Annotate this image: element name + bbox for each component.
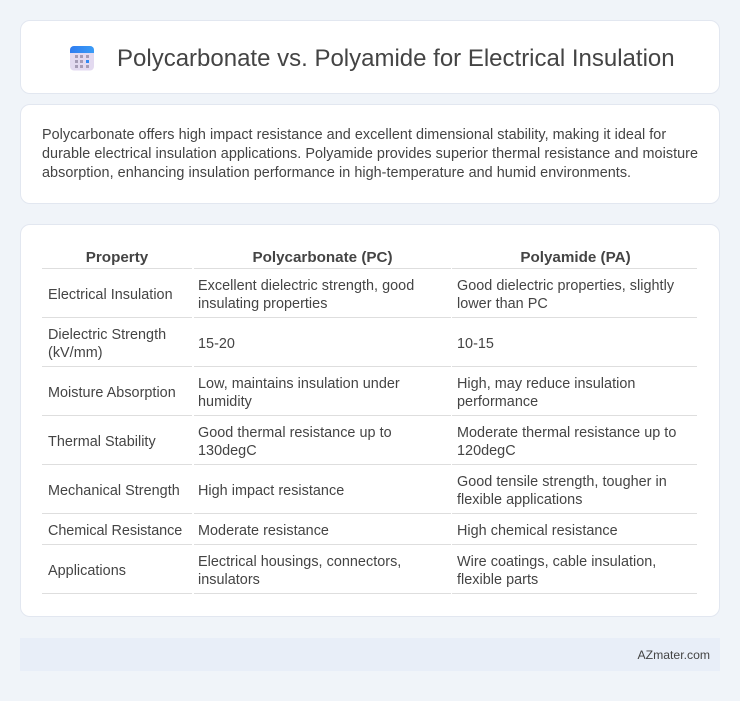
row: dielectric strength: (kV/mm) xyxy=(48,345,103,361)
row: electrical insulation xyxy=(48,278,674,312)
panel: title card xyxy=(20,20,720,94)
row: chemical resistance: Chemical Resistance xyxy=(48,523,182,539)
row: chemical resistance xyxy=(48,523,618,539)
row: mechanical strength: Mechanical Strength xyxy=(48,483,180,499)
summary text: Polycarbonate offers high impact resistance and excellent dimensional stability, making it ideal for xyxy=(42,127,666,143)
title: Polycarbonate vs. Polyamide for Electrical Insulation xyxy=(117,45,675,72)
table header xyxy=(86,249,631,266)
row: chemical resistance: High chemical resistance xyxy=(457,523,618,539)
summary text xyxy=(42,127,698,181)
row: electrical insulation: Good dielectric properties, slightly xyxy=(457,278,674,294)
row: mechanical strength: High impact resistance xyxy=(198,483,344,499)
footer credit: AZmater.com xyxy=(638,648,710,662)
row: mechanical strength: flexible applications xyxy=(457,492,582,508)
row: mechanical strength xyxy=(48,474,667,508)
row: dielectric strength: 15-20 xyxy=(198,336,235,352)
row: mechanical strength: Good tensile strength, tougher in xyxy=(457,474,667,490)
row: thermal stability: Good thermal resistance up to xyxy=(198,425,392,441)
row: dielectric strength xyxy=(48,327,494,361)
row: moisture absorption: Moisture Absorption xyxy=(48,385,176,401)
row: applications: Applications xyxy=(48,563,126,579)
panel: comparison table xyxy=(20,224,720,617)
row: electrical insulation: Electrical Insulation xyxy=(48,287,173,303)
row: moisture absorption: humidity xyxy=(198,394,252,410)
row: thermal stability: 130degC xyxy=(198,443,257,459)
table header: Polyamide (PA) xyxy=(520,249,631,266)
row: electrical insulation: Excellent dielectric strength, good xyxy=(198,278,414,294)
footer bar xyxy=(20,638,720,671)
table header: Polycarbonate (PC) xyxy=(252,249,393,266)
row: thermal stability: 120degC xyxy=(457,443,516,459)
row: applications: Electrical housings, connectors, xyxy=(198,554,401,570)
row: moisture absorption: High, may reduce insulation xyxy=(457,376,635,392)
panel: summary card xyxy=(20,104,720,204)
row: thermal stability xyxy=(48,425,676,459)
row: moisture absorption: Low, maintains insulation under xyxy=(198,376,400,392)
summary text: durable electrical insulation applications. Polyamide provides superior thermal resistance and moisture xyxy=(42,146,698,162)
row: applications: insulators xyxy=(198,572,260,588)
table header: Property xyxy=(86,249,148,266)
row: electrical insulation: insulating properties xyxy=(198,296,327,312)
summary text: absorption, enhancing insulation performance in high-temperature and humid environments. xyxy=(42,165,631,181)
row: dielectric strength: 10-15 xyxy=(457,336,494,352)
row: chemical resistance: Moderate resistance xyxy=(198,523,329,539)
row: dielectric strength: Dielectric Strength xyxy=(48,327,166,343)
row: moisture absorption: performance xyxy=(457,394,538,410)
row: applications xyxy=(48,554,656,588)
icon: calendar grid xyxy=(70,46,94,70)
row: electrical insulation: lower than PC xyxy=(457,296,548,312)
row: moisture absorption xyxy=(48,376,635,410)
row: applications: flexible parts xyxy=(457,572,538,588)
row: applications: Wire coatings, cable insulation, xyxy=(457,554,656,570)
row: thermal stability: Thermal Stability xyxy=(48,434,156,450)
row: thermal stability: Moderate thermal resistance up to xyxy=(457,425,676,441)
